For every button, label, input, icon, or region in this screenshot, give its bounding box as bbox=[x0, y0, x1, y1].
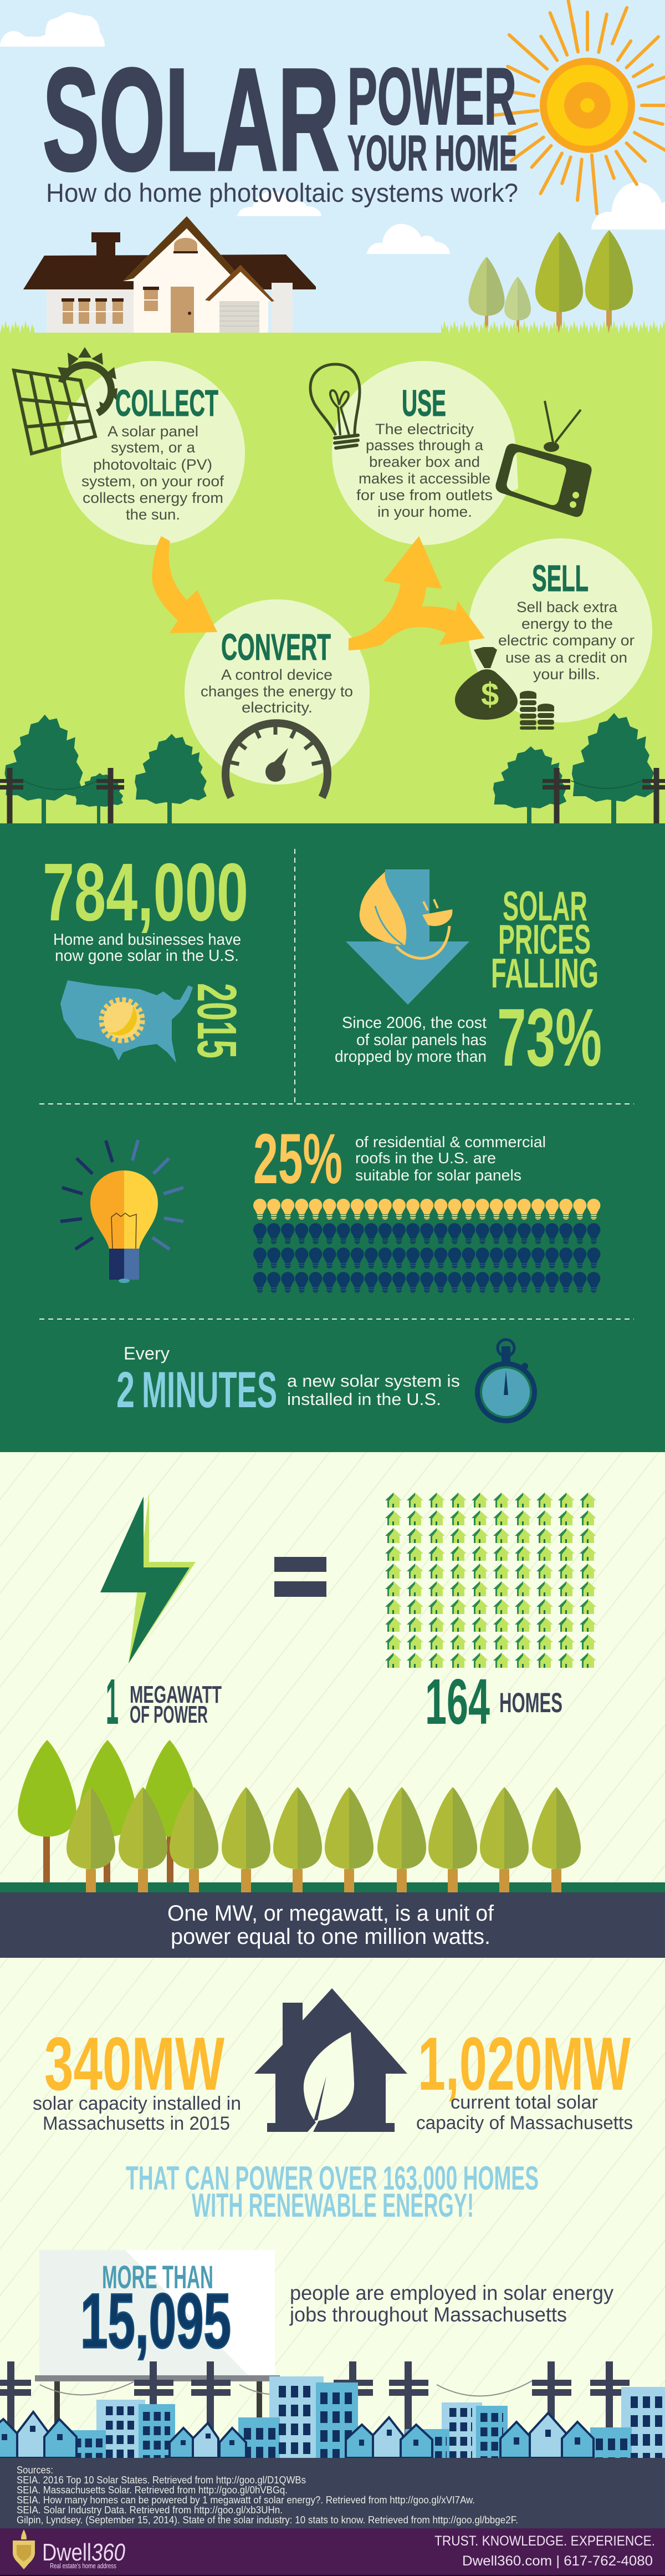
text: sell body: your bills. bbox=[533, 666, 600, 683]
text: suitable roofs bbox=[355, 1133, 546, 1184]
text: every: Every bbox=[124, 1343, 170, 1363]
dark trees and poles bbox=[0, 713, 665, 824]
billboard bbox=[35, 2250, 280, 2448]
heading: convert: CONVERT bbox=[221, 627, 331, 668]
text: new solar system: installed in the U.S. bbox=[287, 1389, 441, 1409]
text: sell body: use as a credit on bbox=[505, 649, 627, 666]
title: YOUR HOME bbox=[347, 126, 518, 181]
icon: falling price arrow with leaf and plug bbox=[346, 869, 469, 1005]
stat: 73%: 73% bbox=[497, 992, 602, 1083]
text: solar jobs: jobs throughout Massachusetts bbox=[289, 2303, 567, 2326]
icon: cloud right bbox=[591, 182, 665, 230]
callout: megawatt definition: power equal to one million watts. bbox=[171, 1925, 490, 1949]
icon: house bbox=[23, 216, 316, 333]
text: cost dropped bbox=[335, 1014, 487, 1066]
chart: bulb pictogram bbox=[253, 1199, 600, 1293]
text: collect body: the sun. bbox=[126, 506, 180, 523]
panel: header sky bbox=[0, 0, 665, 334]
text: use body: for use from outlets bbox=[356, 487, 493, 503]
step: collect bbox=[14, 347, 245, 545]
heading: collect: COLLECT bbox=[115, 383, 218, 424]
text: suitable roofs: of residential & commercial bbox=[355, 1133, 546, 1150]
icon: tree row bbox=[0, 1740, 665, 1892]
icon: television bbox=[495, 401, 592, 517]
logo: dwell360 wordmark: 360 bbox=[91, 2539, 125, 2566]
heading: sell: SELL bbox=[532, 558, 589, 599]
text: source list bbox=[17, 2465, 518, 2526]
heading: power over 163,000 homes: WITH RENEWABLE ENERGY! bbox=[192, 2187, 474, 2224]
grass bbox=[0, 320, 665, 334]
logo: dwell360 wordmark: Real estate's home address bbox=[50, 2562, 116, 2570]
heading: solar prices falling: SOLAR bbox=[503, 883, 587, 929]
text: more than: MORE THAN bbox=[102, 2259, 213, 2295]
logo: dwell360 wordmark: Dwell bbox=[42, 2539, 91, 2566]
heading: use: USE bbox=[402, 383, 446, 424]
text: homes gone solar: now gone solar in the U.S. bbox=[55, 947, 239, 965]
text: source list: Gilpin, Lyndsey. (September 15, 2014). State of the solar industry: 10 stats to know. Retrieved from http://goo.gl/bbge2F. bbox=[17, 2514, 518, 2526]
icon: cloud top left bbox=[0, 12, 105, 47]
text: use body: The electricity bbox=[375, 421, 474, 437]
stat: 2 minutes: MINUTES bbox=[142, 1362, 277, 1418]
heading: solar prices falling bbox=[491, 883, 598, 996]
text: suitable roofs: roofs in the U.S. are bbox=[355, 1149, 496, 1167]
illustration: city skyline bbox=[0, 2361, 665, 2461]
stat: 15,095: 15,095 bbox=[80, 2277, 231, 2364]
text: source list: SEIA. Massachusetts Solar. Retrieved from http://goo.gl/0hVBGq. bbox=[17, 2485, 288, 2496]
icon: large bulb bbox=[60, 1140, 183, 1283]
subtitle: How do home photovoltaic systems work? bbox=[46, 178, 518, 207]
heading: solar prices falling: PRICES bbox=[498, 916, 591, 963]
heading: solar prices falling: FALLING bbox=[491, 950, 598, 996]
heading: 1 megawatt of power bbox=[106, 1666, 222, 1738]
text: contact: Dwell360.com | 617-762-4080 bbox=[462, 2553, 653, 2569]
icon: sun gear bbox=[58, 347, 117, 413]
icon: house with leaf bbox=[254, 1988, 407, 2132]
stat: 2 minutes bbox=[116, 1362, 277, 1418]
text: collect body bbox=[81, 423, 224, 523]
text: cost dropped: Since 2006, the cost bbox=[342, 1014, 487, 1032]
text: homes gone solar: Home and businesses have bbox=[53, 931, 241, 949]
text: collect body: A solar panel bbox=[108, 423, 198, 440]
panel: footer bbox=[0, 2528, 665, 2576]
logo: dwell360 wordmark bbox=[42, 2539, 125, 2570]
text: convert body: electricity. bbox=[242, 699, 313, 716]
arrow: collect to convert bbox=[152, 536, 217, 633]
text: convert body: changes the energy to bbox=[201, 683, 353, 700]
heading: 1 megawatt of power: 1 bbox=[106, 1666, 119, 1738]
icon: money bag and coins bbox=[455, 647, 554, 730]
text: sell body: energy to the bbox=[521, 615, 613, 632]
text: source list: SEIA. How many homes can be powered by 1 megawatt of solar energy?. Retrieved from http://goo.gl/xVI7Aw. bbox=[17, 2494, 475, 2506]
icon: cloud middle bbox=[367, 224, 450, 254]
text: homes gone solar bbox=[53, 931, 241, 965]
text: 340 description: Massachusetts in 2015 bbox=[43, 2113, 230, 2134]
panel: sources bbox=[0, 2458, 665, 2528]
heading: power over 163,000 homes bbox=[126, 2160, 539, 2224]
icon: cloud behind subtitle bbox=[237, 191, 321, 216]
text: solar jobs: people are employed in solar energy bbox=[290, 2282, 613, 2304]
text: use body: in your home. bbox=[377, 503, 472, 520]
text: sell body bbox=[498, 599, 635, 683]
icon: sun bbox=[494, 0, 665, 213]
callout: megawatt definition bbox=[0, 1892, 665, 1958]
text: new solar system: a new solar system is bbox=[287, 1371, 460, 1391]
text: cost dropped: dropped by more than bbox=[335, 1048, 487, 1066]
text: use body: breaker box and bbox=[369, 454, 480, 470]
heading: 1 megawatt of power: MEGAWATT bbox=[130, 1681, 222, 1708]
dashed dividers bbox=[39, 849, 634, 1319]
panel: massachusetts bbox=[0, 1958, 665, 2461]
text: source list: SEIA. Solar Industry Data. Retrieved from http://goo.gl/xb3UHn. bbox=[17, 2504, 283, 2516]
stat: 2 minutes: 2 bbox=[116, 1362, 135, 1418]
text: source list: SEIA. 2016 Top 10 Solar States. Retrieved from http://goo.gl/D1QWBs bbox=[17, 2475, 306, 2486]
text: 1,020 description: capacity of Massachusetts bbox=[416, 2112, 633, 2134]
step: sell bbox=[455, 538, 652, 730]
callout: megawatt definition: One MW, or megawatt, is a unit of bbox=[167, 1901, 494, 1926]
icon: gauge bbox=[226, 723, 328, 797]
stat: 784,000 bbox=[43, 847, 248, 965]
arrow: convert to use and sell bbox=[349, 536, 485, 650]
step: convert bbox=[185, 599, 370, 797]
icon: lightning bolt bbox=[100, 1493, 196, 1663]
text: 340 description: solar capacity installed in bbox=[33, 2093, 241, 2114]
step: use bbox=[310, 361, 592, 545]
title: POWER bbox=[347, 51, 516, 141]
logo: door knocker bbox=[13, 2529, 35, 2569]
panel: national statistics bbox=[0, 823, 665, 1452]
icon: money bag and coins: $ bbox=[481, 676, 499, 712]
heading: 164 homes: HOMES bbox=[499, 1687, 562, 1718]
icon: solar panel bbox=[14, 370, 95, 454]
text: 340 description bbox=[33, 2093, 241, 2134]
text: collect body: collects energy from bbox=[83, 490, 223, 506]
stat: 25%: 25% bbox=[253, 1119, 342, 1199]
text: collect body: photovoltaic (PV) bbox=[93, 456, 212, 473]
panel: megawatt bbox=[0, 1452, 665, 1959]
text: convert body: A control device bbox=[221, 666, 332, 683]
title: SOLAR bbox=[43, 38, 339, 201]
heading: 1 megawatt of power: OF POWER bbox=[130, 1701, 208, 1728]
heading: 164 homes: 164 bbox=[425, 1666, 490, 1738]
text: collect body: system, on your roof bbox=[81, 473, 224, 490]
year label 2015: 2015 bbox=[186, 983, 248, 1058]
text: 1,020 description: current total solar bbox=[451, 2092, 598, 2113]
icon: equals sign bbox=[274, 1557, 326, 1597]
text: use body: makes it accessible bbox=[359, 470, 490, 487]
text: collect body: system, or a bbox=[111, 439, 196, 456]
icon: trees right bbox=[468, 230, 633, 333]
text: source list: Sources: bbox=[17, 2465, 53, 2476]
text: 1,020 description bbox=[416, 2092, 633, 2134]
icon: us map with sun bbox=[60, 980, 193, 1063]
icon: stopwatch bbox=[475, 1340, 537, 1423]
text: use body bbox=[356, 421, 493, 520]
text: use body: passes through a bbox=[366, 437, 484, 454]
icon: light bulb bbox=[310, 364, 360, 448]
stat: 340 MW: 340MW bbox=[44, 2022, 224, 2106]
chart: homes pictogram bbox=[385, 1493, 596, 1668]
text: cost dropped: of solar panels has bbox=[356, 1031, 487, 1049]
text: convert body bbox=[201, 666, 353, 716]
panel: how it works bbox=[0, 333, 665, 824]
text: suitable roofs: suitable for solar panels bbox=[355, 1167, 521, 1184]
text: solar jobs bbox=[289, 2282, 613, 2326]
stat: 784,000: 784,000 bbox=[43, 847, 248, 938]
text: sell body: Sell back extra bbox=[516, 599, 618, 615]
text: new solar system bbox=[287, 1371, 460, 1409]
text: sell body: electric company or bbox=[498, 632, 635, 649]
